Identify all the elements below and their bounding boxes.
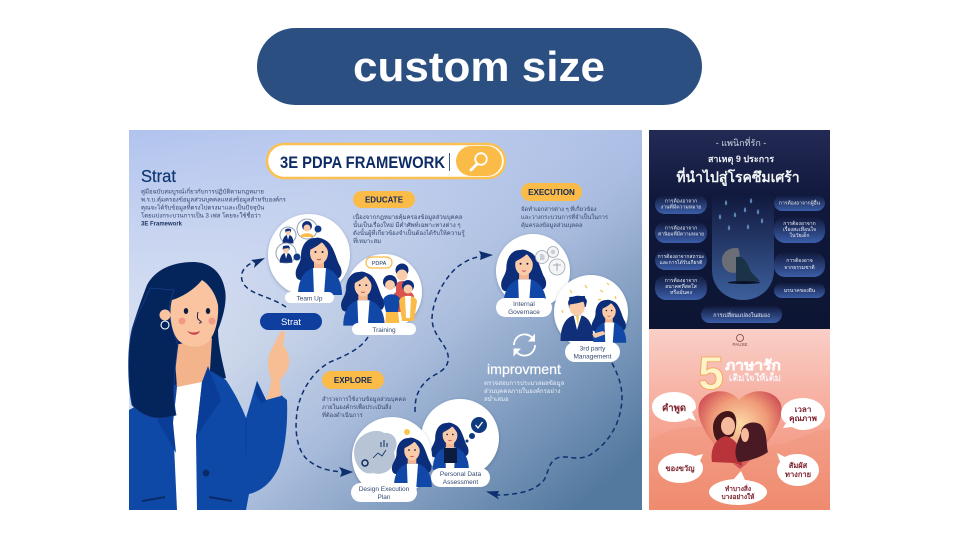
circle: Training: PDPA [372, 261, 387, 267]
text: EXECUTION description: และวางกระบวนการที่จำเป็นในการ [521, 212, 608, 221]
heading: depression poster: ที่นำไปสู่โรคซึมเศร้า [676, 167, 800, 186]
cause pills left: การต้องอาจาก [665, 224, 697, 232]
intro text: Strat: โดยแบ่งกระบวนการเป็น 3 เฟส โดยจะใช้ชื่อว่า [141, 210, 261, 220]
text: EXECUTION description [521, 205, 608, 229]
button: Strat [260, 313, 322, 330]
cause pills left: และการได้รับเกียรติ [660, 259, 702, 266]
label: Personal Data Assessment: Personal Data [440, 471, 481, 478]
text: improvment: ส่วนบุคคลภายในองค์กรอย่าง [484, 387, 561, 395]
cause pills right: การต้องอาจ [786, 257, 813, 264]
title: 5 love languages: 5 [698, 347, 724, 399]
arrow: Execution back to Personal Data [486, 363, 622, 500]
banner: custom size [257, 28, 702, 105]
speech bubbles: บางอย่างให้ [722, 492, 754, 501]
cause pills right [774, 195, 825, 298]
label: Team Up: Team Up [296, 296, 323, 302]
text: improvment: สม่ำเสมอ [484, 395, 509, 403]
circle: Personal Data Assessment [421, 399, 499, 487]
label: Internal Governace: Governace [508, 309, 540, 316]
intro text: Strat: 3E Framework [141, 222, 183, 228]
banner: custom size: custom size [353, 43, 605, 90]
arrow: Explore to Execution [415, 251, 493, 412]
speech bubbles [652, 392, 825, 505]
circle: Team Up [268, 214, 350, 303]
arrow: Strat to Team Up [242, 258, 286, 307]
circle: 3rd party Management [554, 275, 628, 362]
text: EDUCATE description: เนื่องจากกฎหมายคุ้มครองข้อมูลส่วนบุคคล [353, 213, 463, 221]
label: Personal Data Assessment [431, 468, 490, 487]
tag: EXECUTION: EXECUTION [528, 188, 575, 197]
text: EXECUTION description: จัดทำเอกสารต่าง ๆ ที่เกี่ยวข้อง [521, 205, 597, 213]
text: EXPLORE description: สำรวจการใช้งานข้อมูลส่วนบุคคล [322, 395, 406, 403]
text: EXPLORE description: ภายในองค์กรเพื่อประเมินสิ่ง [322, 403, 392, 411]
text: improvment: ตรวจสอบการประมวลผลข้อมูล [484, 380, 565, 387]
arrow: Training to Design Execution Plan [296, 337, 368, 477]
speech bubbles: เวลา [795, 405, 811, 414]
label: Design Execution Plan [351, 483, 417, 502]
label: Personal Data Assessment: Assessment [443, 479, 478, 486]
tag: EDUCATE [353, 191, 415, 208]
speech bubbles: คุณภาพ [789, 414, 817, 424]
intro text: Strat: Strat [141, 166, 176, 186]
circle: Internal Governace [496, 234, 570, 317]
cause pills right: การต้องอาจาก [783, 220, 816, 227]
cause pills right: การต้องอาจากผู้อื่น [779, 200, 821, 206]
logo: PAUSE: PAUSE [733, 342, 747, 347]
cause pills left: การต้องอาจากสถานะ [658, 253, 705, 260]
label: Training: Training [372, 327, 396, 334]
text: EXPLORE description [322, 395, 406, 419]
label: 3rd party Management [565, 342, 620, 362]
main character: woman pointing [129, 262, 289, 510]
speech bubbles: ทำบางสิ่ง [725, 483, 751, 493]
cause pills right: มรนาคของยีน [784, 287, 816, 294]
heading: depression poster [676, 136, 800, 186]
speech bubbles: สัมผัส [789, 461, 808, 470]
button: Strat: Strat [281, 317, 301, 328]
intro text: Strat [141, 166, 287, 228]
cause pill bottom: การเปลี่ยนแปลงในสมอง [713, 311, 770, 319]
illustration: figure under rain [712, 193, 774, 300]
title: 5 love languages [698, 347, 781, 399]
tag: EXPLORE: EXPLORE [334, 376, 373, 385]
panel: 5 love languages poster [649, 329, 830, 510]
label: Design Execution Plan: Plan [377, 494, 391, 501]
panel: 3E PDPA framework infographic [129, 130, 642, 510]
cause pills right: จากธรรมชาติ [784, 264, 815, 271]
title: 5 love languages: ภาษารัก [725, 357, 781, 373]
circle: Design Execution Plan [351, 417, 432, 502]
tag: EXECUTION [521, 183, 582, 201]
icon: improvement cycle [514, 334, 535, 356]
cause pills left: หรือมั่นคง [670, 289, 692, 296]
search bar heading [267, 144, 505, 178]
text: EDUCATE description [353, 213, 466, 245]
label: Internal Governace [496, 298, 552, 317]
cause pills right: เรื่องสะเทือนใจ [783, 226, 816, 233]
cause pills left: ค่านิยมที่มีความหมาย [658, 230, 704, 238]
label: Internal Governace: Internal [513, 301, 535, 308]
heading: depression poster: สาเหตุ 9 ประการ [708, 154, 774, 165]
heart with couple [698, 391, 782, 469]
speech bubbles: ของขวัญ [665, 464, 695, 473]
cause pills left [655, 195, 707, 300]
text: EDUCATE description: ดังนั้นผู้ที่เกี่ยวข้องจำเป็นต้องได้รับให้ความรู้ [353, 227, 466, 237]
text: improvment [484, 361, 565, 403]
cause pill bottom [701, 306, 782, 323]
search bar heading: 3E PDPA FRAMEWORK [280, 154, 445, 172]
label: 3rd party Management: Management [574, 354, 612, 360]
circle: Training [341, 254, 422, 335]
intro text: Strat: พ.ร.บ.คุ้มครองข้อมูลส่วนบุคคลแหล่งข้อมูลสำหรับองค์กร [141, 196, 287, 204]
cause pills right: ในวัยเด็ก [790, 231, 809, 239]
heading: depression poster: - แพนิกที่รัก - [716, 136, 766, 148]
label: 3rd party Management: 3rd party [580, 346, 606, 352]
speech bubbles: ทางกาย [785, 470, 811, 479]
tag: EXPLORE [322, 371, 384, 389]
title: 5 love languages: เติมใจให้เต็ม [729, 371, 781, 384]
cause pills left: การต้องอาจาก [665, 198, 697, 204]
text: EXECUTION description: คุ้มครองข้อมูลส่วนบุคคล [521, 222, 583, 229]
text: EDUCATE description: นั้นเป็นเรื่องใหม่ มีคำศัพท์เฉพาะทางต่าง ๆ [353, 219, 461, 229]
text: EXPLORE description: ที่ต้องดำเนินการ [322, 411, 363, 419]
tag: EDUCATE: EDUCATE [365, 196, 404, 204]
logo: PAUSE [733, 334, 747, 347]
intro text: Strat: คู่มือฉบับสมบูรณ์เกี่ยวกับการปฏิบัติตามกฎหมาย [141, 188, 264, 196]
intro text: Strat: คุณจะได้รับข้อมูลที่ตรงไปตรงมาและเป็นปัจจุบัน [141, 202, 264, 212]
cause pills left: การต้องอาจาก [665, 277, 697, 284]
cause pills left: งานที่มีความหมาย [661, 204, 701, 210]
label: Design Execution Plan: Design Execution [359, 486, 410, 493]
speech bubbles: คำพูด [662, 403, 686, 415]
text: EDUCATE description: ที่เหมาะสม [353, 237, 381, 245]
text: improvment: improvment [487, 361, 561, 377]
cause pills left: อนาคตที่สดใส [665, 283, 697, 290]
panel: depression causes poster [649, 130, 830, 329]
